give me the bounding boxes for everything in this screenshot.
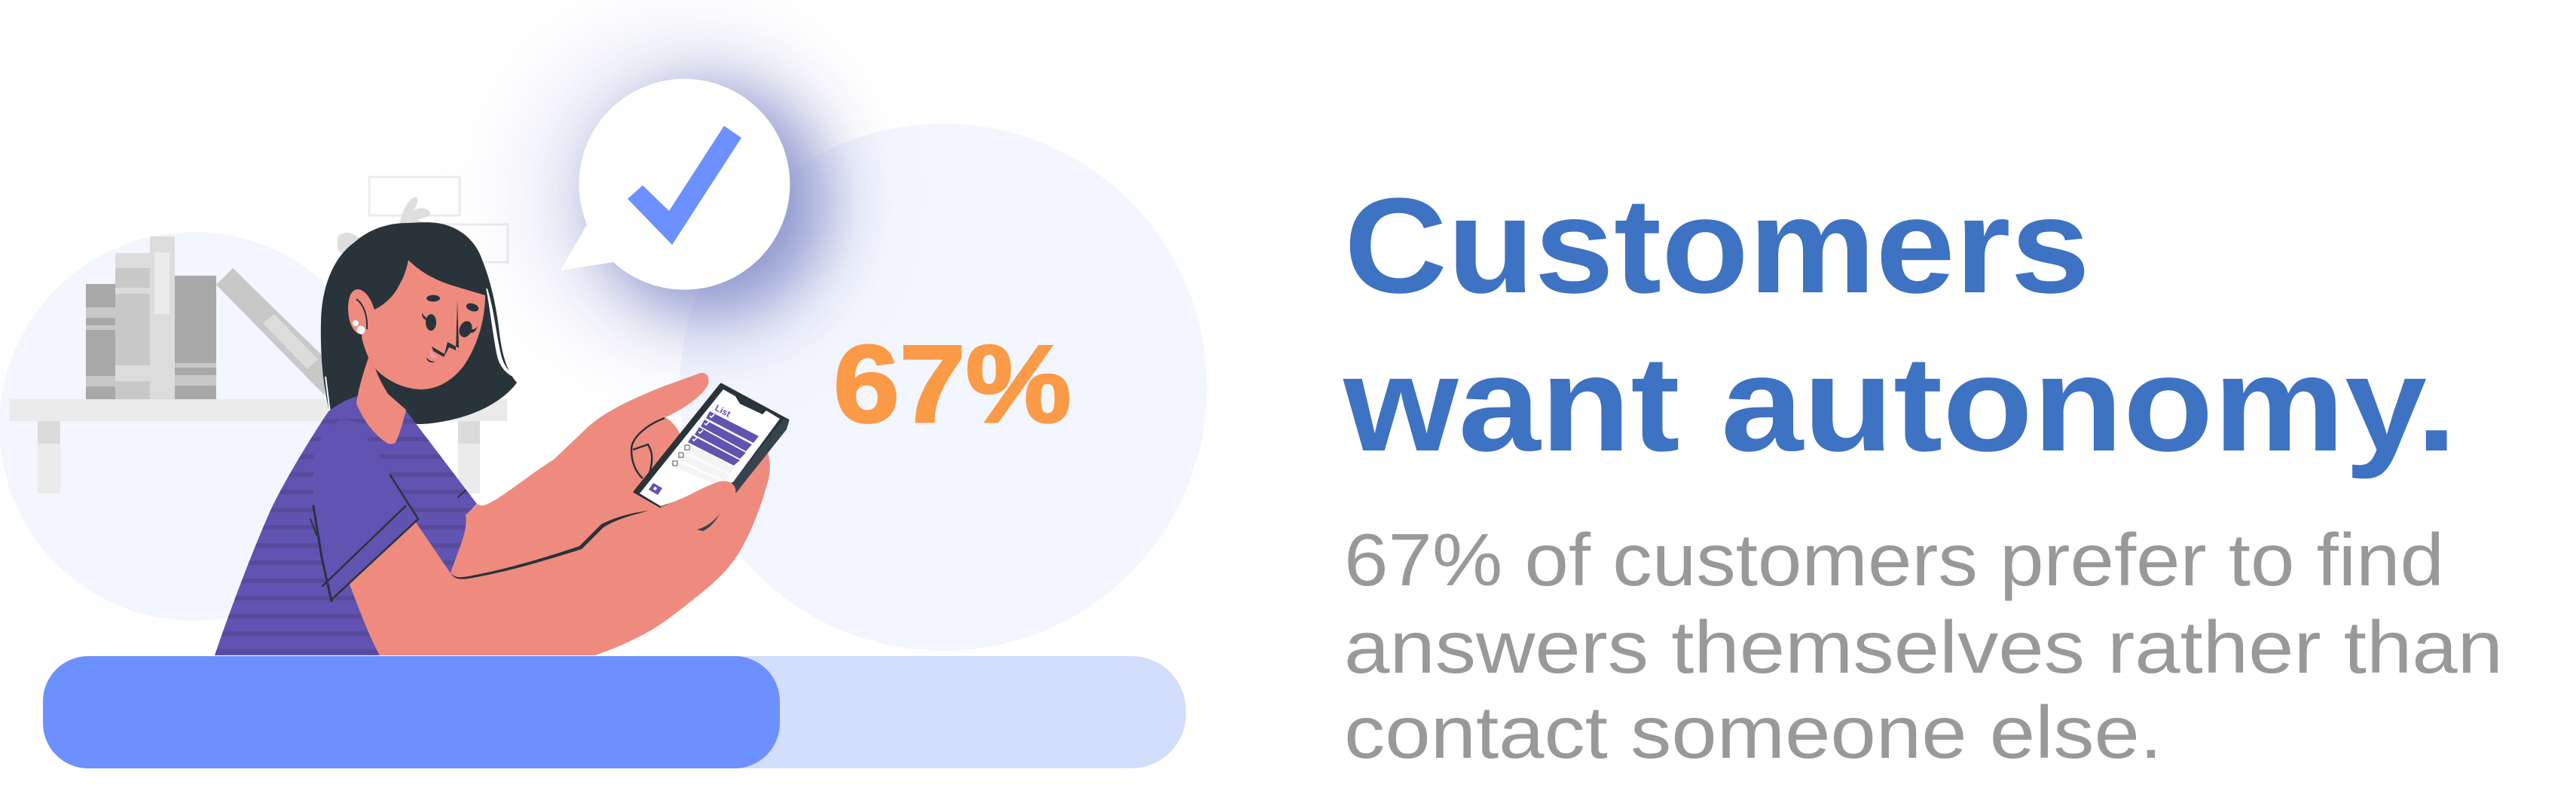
- ear detail and earrings: [353, 299, 367, 334]
- heading: want autonomy.: [1343, 328, 2457, 480]
- arm and hand: [349, 373, 770, 655]
- finger outline: [631, 418, 665, 478]
- thumb: [661, 481, 746, 527]
- mouth: [430, 350, 438, 359]
- wall frames and plant: [338, 177, 508, 262]
- ear: [348, 289, 374, 354]
- screen title: List: [714, 402, 732, 420]
- speech bubble shadow: [527, 38, 836, 347]
- palm crease: [697, 514, 720, 531]
- progress bar fill: [43, 656, 780, 768]
- heading: [1343, 170, 2457, 480]
- check mark: [628, 126, 741, 245]
- search button: [649, 483, 662, 495]
- checked rows: [688, 411, 759, 466]
- phone: [634, 384, 789, 507]
- arm crease: [451, 511, 648, 579]
- neck: [356, 358, 406, 444]
- person illustration: [203, 222, 789, 655]
- fringe: [408, 260, 459, 287]
- phone screen: [640, 389, 780, 506]
- sleeve lines: [310, 475, 466, 601]
- shelf with books: [10, 237, 507, 493]
- sleeve: [313, 419, 417, 600]
- body text: 67% of customers prefer to find: [1344, 518, 2444, 601]
- shirt: [215, 396, 477, 655]
- background circle right: [680, 124, 1207, 651]
- unchecked rows: [671, 444, 735, 485]
- background circle left: [0, 232, 388, 621]
- speech bubble with check mark: [561, 79, 790, 290]
- percentage label: 67%: [833, 322, 1071, 445]
- hair highlights: [325, 289, 520, 413]
- hair: [321, 222, 517, 424]
- crease overlay: [601, 511, 648, 527]
- shirt stripes: [215, 419, 473, 654]
- bubble: [561, 79, 790, 290]
- body text: [1344, 518, 2503, 774]
- face: [362, 260, 485, 389]
- heading: Customers: [1344, 170, 2090, 322]
- phone side edge: [733, 419, 789, 493]
- phone body: [634, 384, 788, 507]
- row check marks: [692, 414, 714, 441]
- checkboxes: [673, 445, 689, 466]
- body text: contact someone else.: [1344, 691, 2162, 774]
- body text: answers themselves rather than: [1344, 606, 2503, 689]
- progress bar track: [43, 656, 1186, 768]
- facial features: [422, 295, 480, 362]
